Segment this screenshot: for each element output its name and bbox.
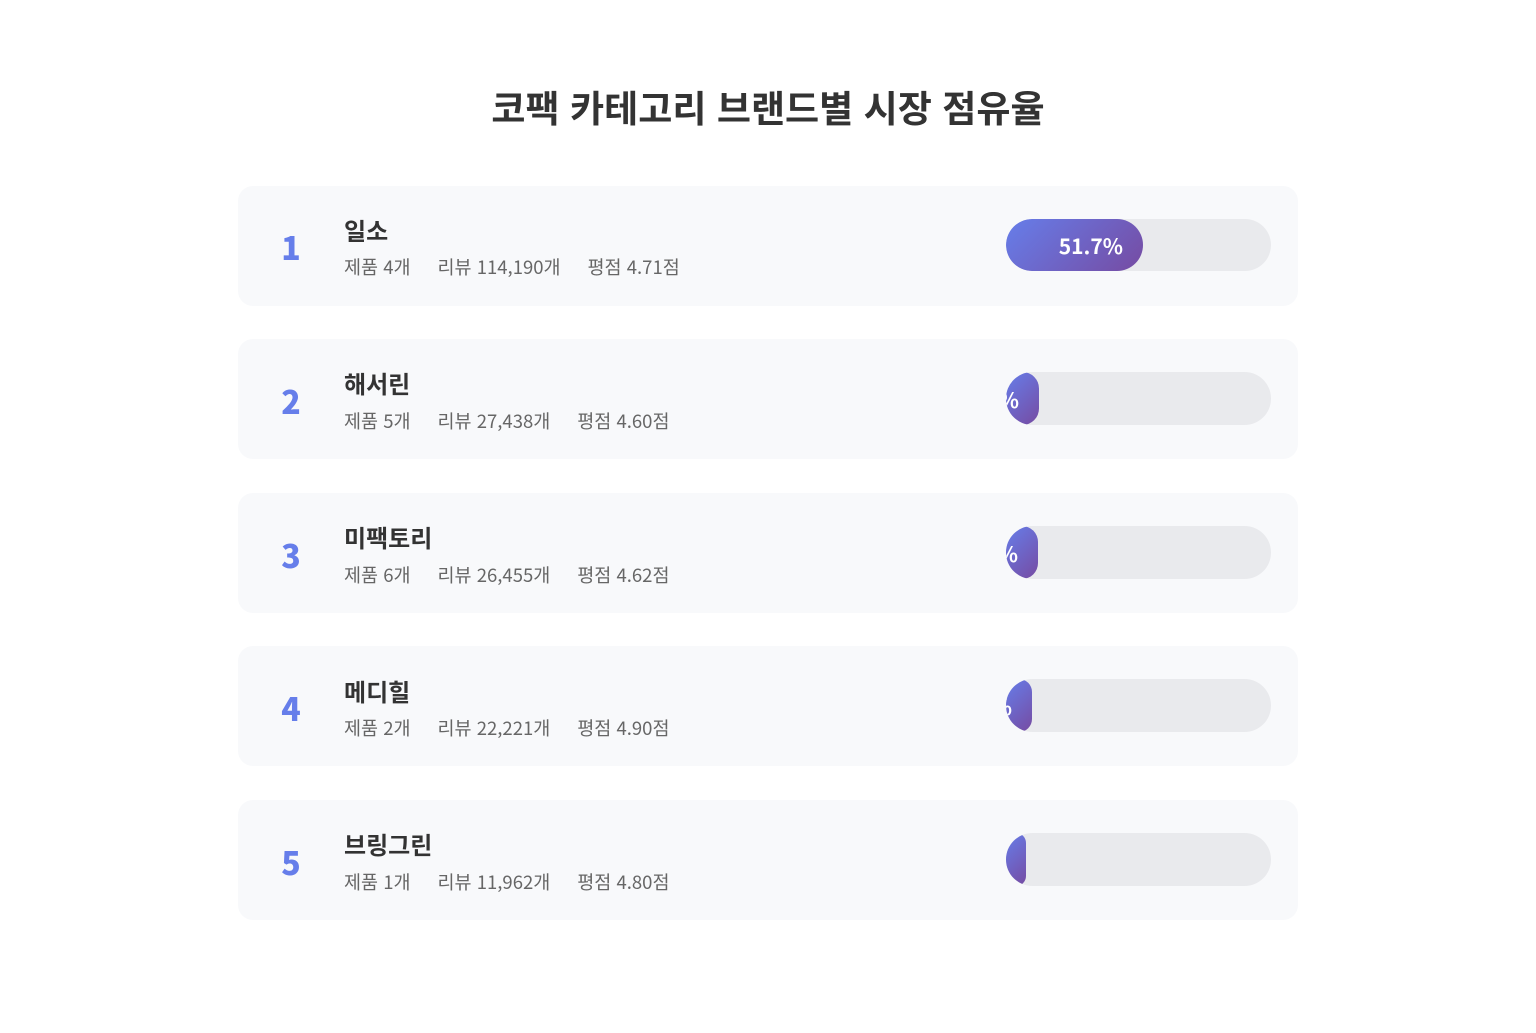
brand stats: 평점 4.60점 bbox=[577, 408, 669, 434]
share bar 12.4% bbox=[1006, 372, 1271, 425]
panel: rank 3 brand bbox=[238, 493, 1298, 613]
brand stats: 평점 4.90점 bbox=[577, 715, 669, 741]
rank number 3: 3 bbox=[281, 532, 301, 578]
brand stats bbox=[344, 562, 669, 588]
brand stats: 리뷰 22,221개 bbox=[438, 715, 550, 741]
brand stats: 제품 6개 bbox=[344, 562, 411, 588]
brand stats: 리뷰 11,962개 bbox=[438, 869, 550, 895]
brand name: 메디힐 bbox=[344, 673, 410, 708]
share bar 5.4% bbox=[1006, 833, 1271, 886]
brand stats: 리뷰 26,455개 bbox=[438, 562, 550, 588]
brand stats: 제품 5개 bbox=[344, 408, 411, 434]
brand stats: 리뷰 114,190개 bbox=[438, 254, 561, 280]
brand stats: 리뷰 27,438개 bbox=[438, 408, 550, 434]
title: 코팩 카테고리 브랜드별 시장 점유율 bbox=[491, 79, 1045, 133]
share bar 51.7% bbox=[1006, 219, 1271, 271]
brand stats: 제품 4개 bbox=[344, 254, 411, 280]
panel: rank 4 brand bbox=[238, 646, 1298, 766]
brand stats: 평점 4.71점 bbox=[588, 254, 680, 280]
share bar 51.7%: 51.7% bbox=[1059, 231, 1123, 261]
brand stats: 제품 1개 bbox=[344, 869, 411, 895]
brand name: 해서린 bbox=[344, 365, 410, 400]
rank number 4: 4 bbox=[281, 685, 301, 731]
brand stats bbox=[344, 869, 669, 895]
brand stats: 제품 2개 bbox=[344, 715, 411, 741]
brand stats bbox=[344, 254, 680, 280]
brand name: 브링그린 bbox=[344, 826, 432, 861]
share bar 12.0% bbox=[1006, 526, 1271, 579]
rank number 2: 2 bbox=[281, 378, 301, 424]
brand stats: 평점 4.62점 bbox=[577, 562, 669, 588]
panel: rank 2 brand bbox=[238, 339, 1298, 459]
brand stats bbox=[344, 408, 669, 434]
brand name: 일소 bbox=[344, 212, 388, 247]
panel: rank 1 brand bbox=[238, 186, 1298, 306]
share bar 10.1% bbox=[1006, 679, 1271, 732]
rank number 1: 1 bbox=[281, 224, 301, 270]
rank number 5: 5 bbox=[281, 839, 301, 885]
brand stats: 평점 4.80점 bbox=[577, 869, 669, 895]
panel: rank 5 brand bbox=[238, 800, 1298, 920]
brand name: 미팩토리 bbox=[344, 519, 432, 554]
brand stats bbox=[344, 715, 669, 741]
